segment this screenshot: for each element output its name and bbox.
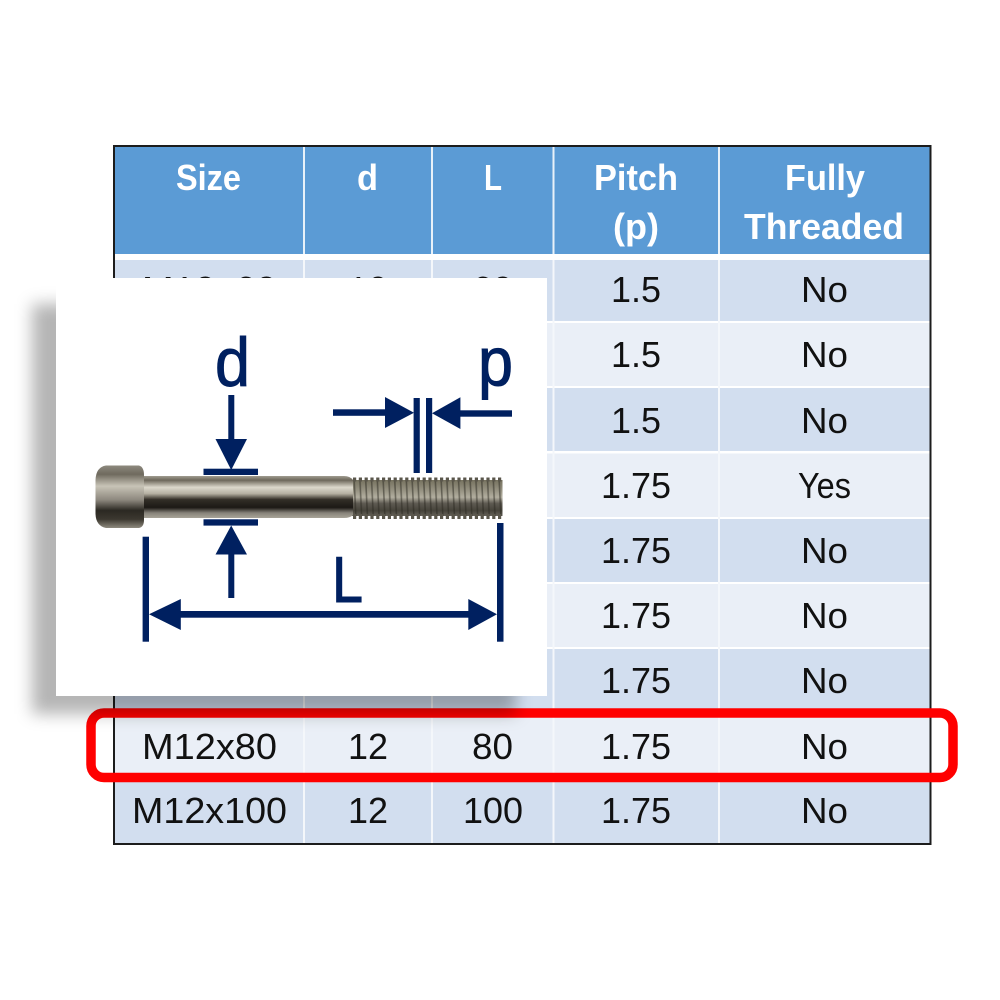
label: L: L bbox=[332, 543, 363, 616]
row 4 values: 1.75 bbox=[601, 465, 671, 506]
bolt shank bbox=[141, 476, 353, 518]
table header row: Threaded bbox=[744, 206, 904, 247]
length dimension arrows bbox=[143, 523, 504, 642]
row 5 values: 1.75 bbox=[601, 530, 671, 571]
row 2 values: No bbox=[801, 334, 848, 375]
panel background bbox=[56, 278, 547, 696]
size table bbox=[114, 146, 930, 844]
table header row: Pitch bbox=[594, 157, 678, 198]
row M10x60: No bbox=[801, 269, 848, 310]
row 3 values bbox=[611, 400, 848, 441]
table header row bbox=[114, 146, 930, 254]
row M12x100: 1.75 bbox=[601, 790, 671, 831]
row M10x60: 1.5 bbox=[611, 269, 661, 310]
row M12x80: 1.75 bbox=[601, 726, 671, 767]
row M10x60: M10x60 bbox=[142, 269, 277, 310]
table border bbox=[114, 146, 930, 844]
row M10x60: 60 bbox=[472, 269, 513, 310]
bolt photo bbox=[96, 466, 502, 528]
row 6 values bbox=[601, 595, 848, 636]
row 5 values: No bbox=[801, 530, 848, 571]
row 4 values: Yes bbox=[798, 465, 851, 506]
d dimension arrows bbox=[204, 395, 258, 598]
row 2 values: 1.5 bbox=[611, 334, 661, 375]
row 2 values bbox=[611, 334, 848, 375]
pitch dimension arrows bbox=[333, 397, 512, 473]
photo panel drop shadow bbox=[32, 304, 516, 714]
row M12x100: 12 bbox=[348, 790, 388, 831]
table row backgrounds bbox=[114, 260, 930, 844]
row M12x100: No bbox=[801, 790, 848, 831]
table header row: Fully bbox=[785, 157, 865, 198]
row M12x80 bbox=[142, 726, 848, 767]
red highlight around M12x80 row bbox=[91, 713, 953, 778]
panel: bolt diagram bbox=[56, 278, 547, 696]
row M10x60 bbox=[142, 269, 848, 310]
row M10x60: 10 bbox=[348, 269, 388, 310]
row M12x80: 12 bbox=[348, 726, 388, 767]
label: d: d bbox=[215, 324, 250, 401]
row M12x80: 80 bbox=[472, 726, 513, 767]
table header row: Size bbox=[176, 157, 241, 198]
row M12x80: M12x80 bbox=[142, 726, 277, 767]
row 5 values bbox=[601, 530, 848, 571]
table header row: L bbox=[484, 157, 502, 198]
bolt head bbox=[96, 466, 144, 528]
row M12x80: No bbox=[801, 726, 848, 767]
row 7 values bbox=[601, 660, 848, 701]
row M12x100: M12x100 bbox=[132, 790, 287, 831]
row 6 values: No bbox=[801, 595, 848, 636]
row 6 values: 1.75 bbox=[601, 595, 671, 636]
table header row: (p) bbox=[613, 206, 659, 247]
row 4 values bbox=[601, 465, 851, 506]
row 3 values: No bbox=[801, 400, 848, 441]
row M12x100: 100 bbox=[463, 790, 523, 831]
bolt thread bbox=[352, 480, 502, 516]
row 3 values: 1.5 bbox=[611, 400, 661, 441]
table header row: d bbox=[357, 157, 378, 198]
row M12x100 bbox=[132, 790, 848, 831]
row 7 values: No bbox=[801, 660, 848, 701]
row 7 values: 1.75 bbox=[601, 660, 671, 701]
label: p: p bbox=[478, 323, 513, 400]
